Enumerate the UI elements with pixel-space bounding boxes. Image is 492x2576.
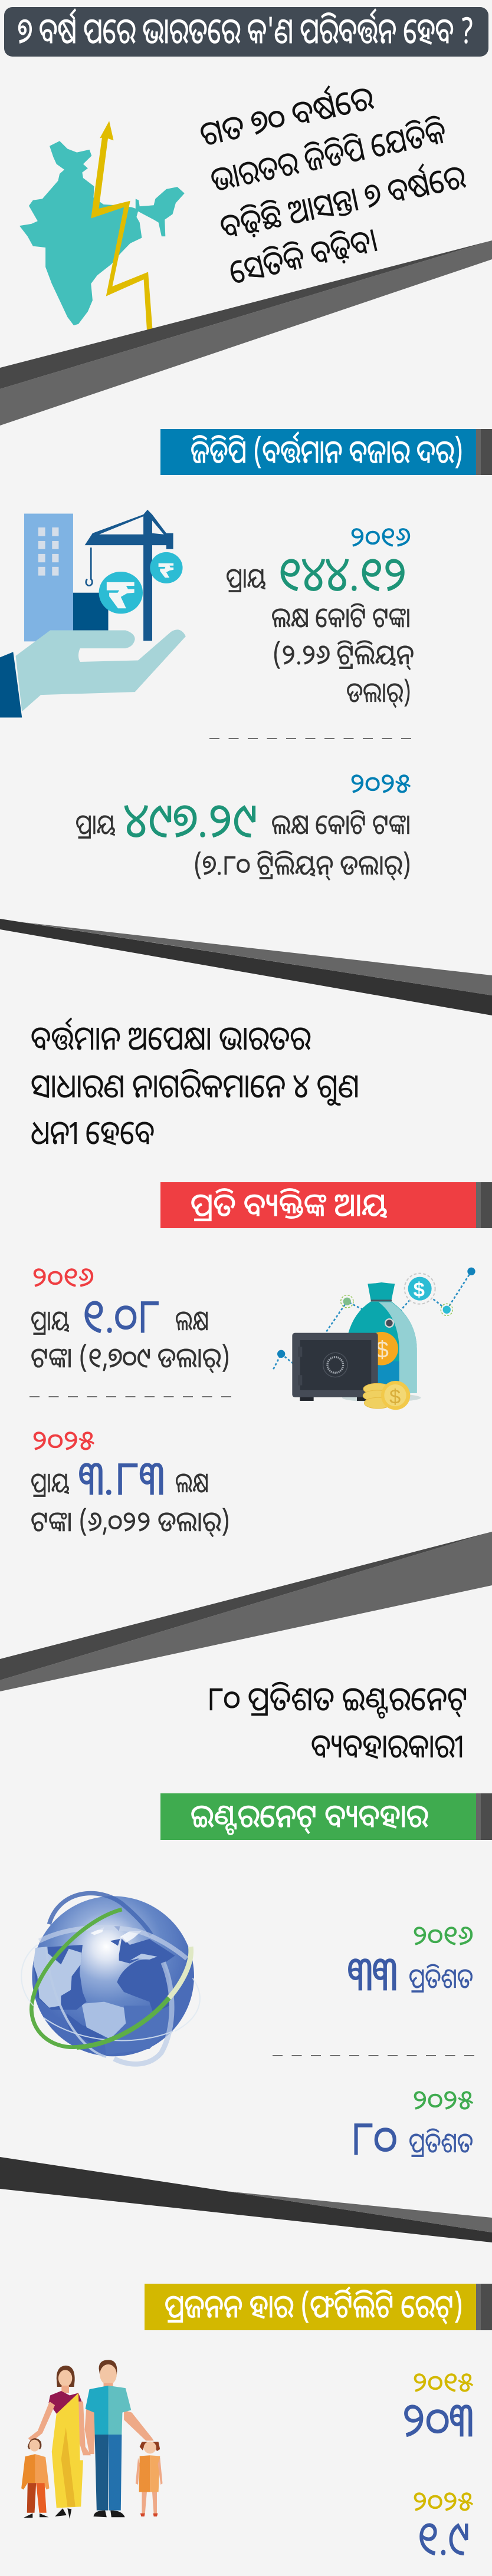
internet 2016 figures: ୨୦୧୬	[412, 1917, 473, 1953]
GDP 2016 figures	[226, 518, 414, 710]
text: 80 percent internet users	[207, 1675, 468, 1767]
icon: safe, money bag, coins and trend line: $	[389, 1386, 401, 1409]
paragraph: citizens 4x richer: ବର୍ତ୍ତମାନ ଅପେକ୍ଷା ଭାରତର	[31, 1015, 311, 1060]
income 2025 figures: ପ୍ରାୟ	[31, 1463, 70, 1500]
arrow: zig-zag growth arrow	[91, 121, 153, 329]
rotated intro text	[195, 74, 469, 294]
fertility 2015 figures: ୨୦୩	[402, 2386, 473, 2450]
income 2016 figures: ଟଙ୍କା (୧,୭୦୯ ଡଲାର୍)	[31, 1338, 230, 1376]
fertility 2025 figures	[412, 2482, 473, 2569]
GDP 2016 figures: ଲକ୍ଷ କୋଟି ଟଙ୍କା	[271, 598, 411, 635]
income 2016 figures	[31, 1258, 230, 1376]
divider band 3	[0, 1532, 492, 1691]
fertility 2025 figures: ୧.୯	[417, 2505, 470, 2569]
income 2016 figures: ୨୦୧୬	[32, 1258, 94, 1295]
internet 2025 figures: ପ୍ରତିଶତ	[409, 2123, 473, 2161]
GDP 2016 figures: (୨.୨୬ ଟ୍ରିଲିୟନ୍	[273, 635, 414, 672]
heading: internet use: ଇଣ୍ଟରନେଟ୍ ବ୍ୟବହାର	[191, 1793, 428, 1836]
income 2025 figures: ୨୦୨୫	[32, 1421, 94, 1458]
text: 80 percent internet users: ବ୍ୟବହାରକାରୀ	[311, 1723, 464, 1767]
income 2025 figures: ଲକ୍ଷ	[175, 1463, 209, 1500]
fertility 2025 figures: ୨୦୨୫	[412, 2482, 473, 2519]
internet 2025 figures: ୨୦୨୫	[412, 2081, 473, 2117]
internet 2025 figures	[350, 2081, 473, 2169]
GDP 2016 figures: ପ୍ରାୟ	[226, 558, 266, 596]
paragraph: citizens 4x richer: ସାଧାରଣ ନାଗରିକମାନେ ୪ ଗୁଣ	[31, 1063, 359, 1107]
rotated intro text: ଭାରତର ଜିଡିପି ଯେତିକି	[206, 108, 450, 202]
fertility 2015 figures	[402, 2363, 473, 2450]
internet 2016 figures: ୩୩	[347, 1940, 397, 2004]
GDP 2016 figures: ଡଲାର୍)	[346, 672, 411, 710]
rotated intro text: ଗତ ୭୦ ବର୍ଷରେ	[195, 74, 378, 156]
GDP 2025 figures: ପ୍ରାୟ	[76, 804, 116, 842]
GDP 2016 figures: ୨୦୧୬	[350, 518, 411, 555]
GDP 2025 figures: ୨୦୨୫	[350, 764, 411, 801]
rotated intro text: ସେତିକି ବଢ଼ିବ।	[225, 216, 382, 294]
heading: per capita income	[160, 1182, 492, 1228]
divider band 1	[0, 240, 492, 426]
fertility 2015 figures: ୨୦୧୫	[412, 2363, 473, 2400]
GDP 2025 figures: (୭.୮୦ ଟ୍ରିଲିୟନ୍ ଡଲାର୍)	[193, 845, 411, 883]
internet 2016 figures	[347, 1917, 473, 2004]
divider band 4	[0, 2157, 492, 2242]
income 2025 figures: ଟଙ୍କା (୬,୦୨୨ ଡଲାର୍)	[31, 1502, 230, 1539]
GDP 2025 figures: ୪୯୭.୨୯	[124, 787, 257, 851]
internet 2016 figures: ପ୍ରତିଶତ	[409, 1958, 473, 1996]
GDP 2025 figures: ଲକ୍ଷ କୋଟି ଟଙ୍କା	[271, 804, 411, 842]
divider band 2	[0, 919, 492, 1015]
icon: hand holding building, crane and rupee coins	[0, 510, 186, 717]
income 2016 figures: ଲକ୍ଷ	[175, 1301, 209, 1338]
income 2016 figures: ପ୍ରାୟ	[31, 1301, 70, 1338]
heading: per capita income: ପ୍ରତି ବ୍ୟକ୍ତିଙ୍କ ଆୟ	[191, 1182, 388, 1225]
paragraph: citizens 4x richer: ଧନୀ ହେବେ	[31, 1109, 155, 1154]
text: 80 percent internet users: ୮୦ ପ୍ରତିଶତ ଇଣ୍ଟରନେଟ୍	[207, 1675, 468, 1720]
icon: safe, money bag, coins and trend line	[273, 1268, 475, 1410]
GDP 2016 figures: ୧୪୪.୧୨	[278, 540, 407, 605]
income 2025 figures: ୩.୮୩	[78, 1444, 164, 1509]
icon: safe, money bag, coins and trend line: $	[414, 1279, 425, 1301]
income 2025 figures	[31, 1421, 230, 1539]
icon: family of four	[21, 2360, 163, 2519]
internet 2025 figures: ୮୦	[350, 2105, 397, 2169]
icon: globe with orbit rings	[21, 1894, 200, 2064]
icon: India map	[19, 141, 185, 325]
paragraph: citizens 4x richer	[31, 1015, 359, 1154]
GDP 2025 figures	[76, 764, 411, 883]
icon: safe, money bag, coins and trend line: $	[376, 1337, 389, 1363]
income 2016 figures: ୧.୦୮	[82, 1282, 160, 1347]
